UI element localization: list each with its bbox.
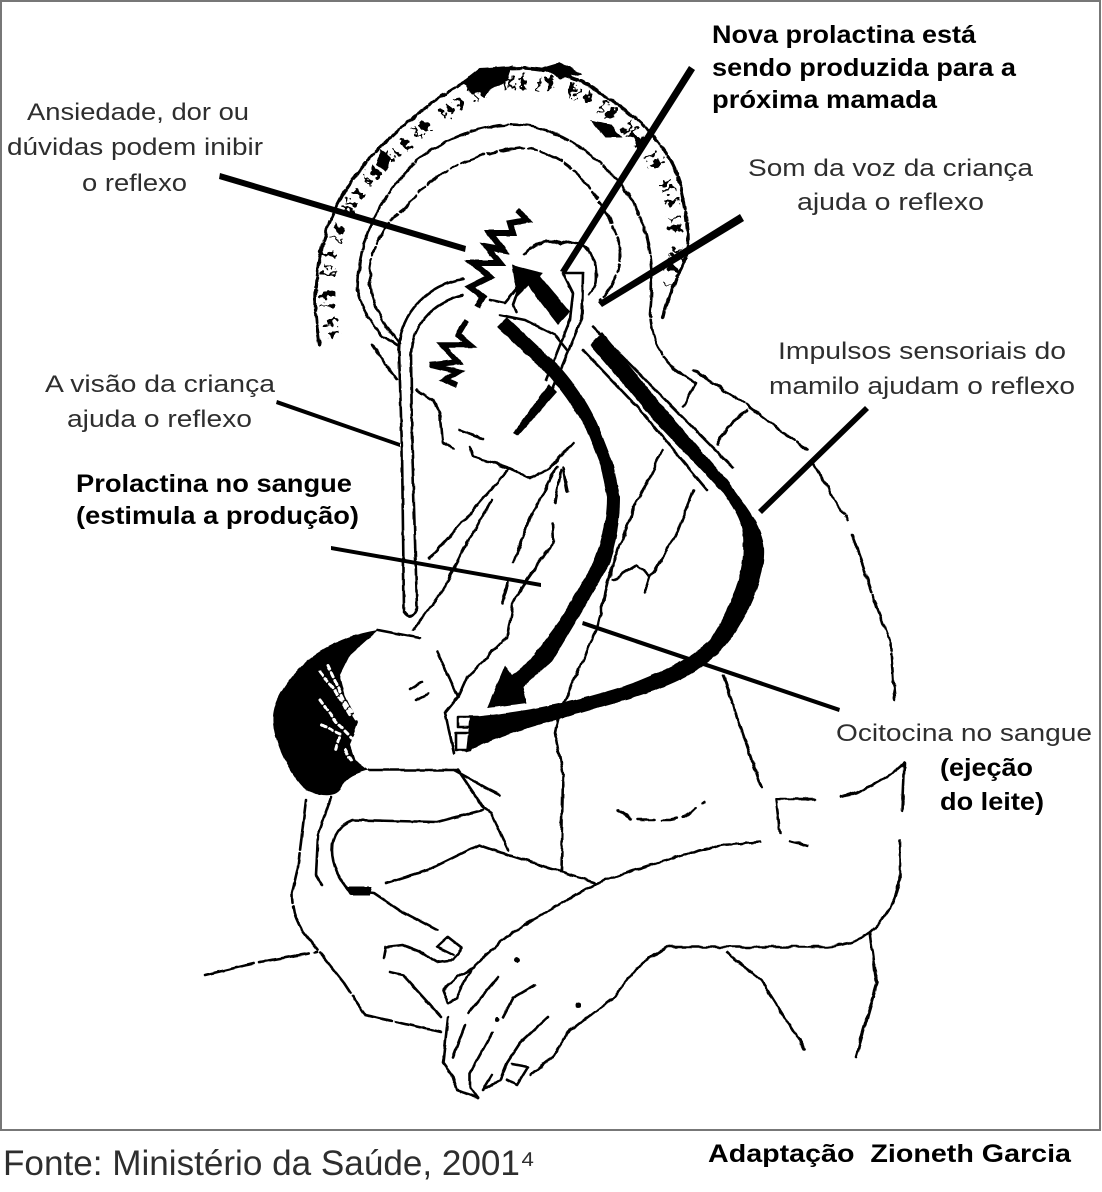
baby back and body — [369, 770, 508, 850]
label: sight: ajuda o reflexo — [67, 406, 252, 433]
illustration: baby — [205, 630, 508, 1032]
illustration: mother's head and hair — [315, 62, 688, 380]
callout line: prolactin in blood — [331, 546, 541, 587]
breast and nipple — [456, 717, 478, 750]
callout line: new prolactin — [560, 66, 695, 273]
callout line: sensory impulses — [758, 406, 869, 514]
label: oxytocin in blood — [836, 720, 1092, 816]
illustration: mother's hand — [443, 957, 581, 1098]
baby's thumb resting on mother's hand — [386, 937, 462, 962]
label: oxytocin in blood: Ocitocina no sangue — [836, 720, 1092, 747]
callout line: oxytocin — [582, 621, 840, 712]
label: new prolactin: sendo produzida para a — [712, 54, 1017, 82]
label: baby's voice: ajuda o reflexo — [797, 189, 984, 216]
label: sight: A visão da criança — [45, 371, 276, 398]
callout line: anxiety — [219, 173, 466, 252]
adaptation credit: Adaptação Zioneth Garcia — [708, 1140, 1072, 1168]
callout line: sight — [276, 400, 400, 447]
label: anxiety: Ansiedade, dor ou — [27, 99, 249, 126]
label: prolactin in blood: (estimula a produção) — [76, 502, 359, 530]
label: prolactin in blood: Prolactina no sangue — [76, 470, 352, 498]
mother's forearm under baby — [292, 800, 441, 1032]
label: anxiety: dúvidas podem inibir — [7, 134, 263, 161]
label: baby's voice: Som da voz da criança — [748, 155, 1034, 182]
label: new prolactin: Nova prolactina está — [712, 21, 976, 49]
tube: oxytocin signal from brain — [513, 273, 583, 436]
label: new prolactin: próxima mamada — [712, 86, 938, 114]
baby head and face — [378, 630, 458, 753]
icon: brain zigzag (inhibition pathway) — [430, 210, 567, 385]
arrow: visual pathway from eye to baby (double tube) — [399, 279, 463, 616]
source: Fonte: Ministério da Saúde, 2001⁴ — [3, 1144, 535, 1183]
callout line: baby's voice — [598, 214, 744, 307]
label: oxytocin in blood: (ejeção — [940, 754, 1033, 782]
baby hair — [273, 630, 378, 795]
illustration: mother's body and dress — [413, 368, 904, 1075]
arrow: sensory impulses from nipple to brain — [466, 265, 764, 752]
pillow surface — [205, 952, 317, 975]
label: oxytocin in blood: do leite) — [940, 788, 1044, 816]
label: sensory impulses: mamilo ajudam o reflexo — [769, 373, 1075, 400]
label: sensory impulses: Impulsos sensoriais do — [778, 338, 1066, 365]
label: anxiety: o reflexo — [82, 170, 187, 197]
arrow: prolactin to the breast — [487, 317, 620, 708]
